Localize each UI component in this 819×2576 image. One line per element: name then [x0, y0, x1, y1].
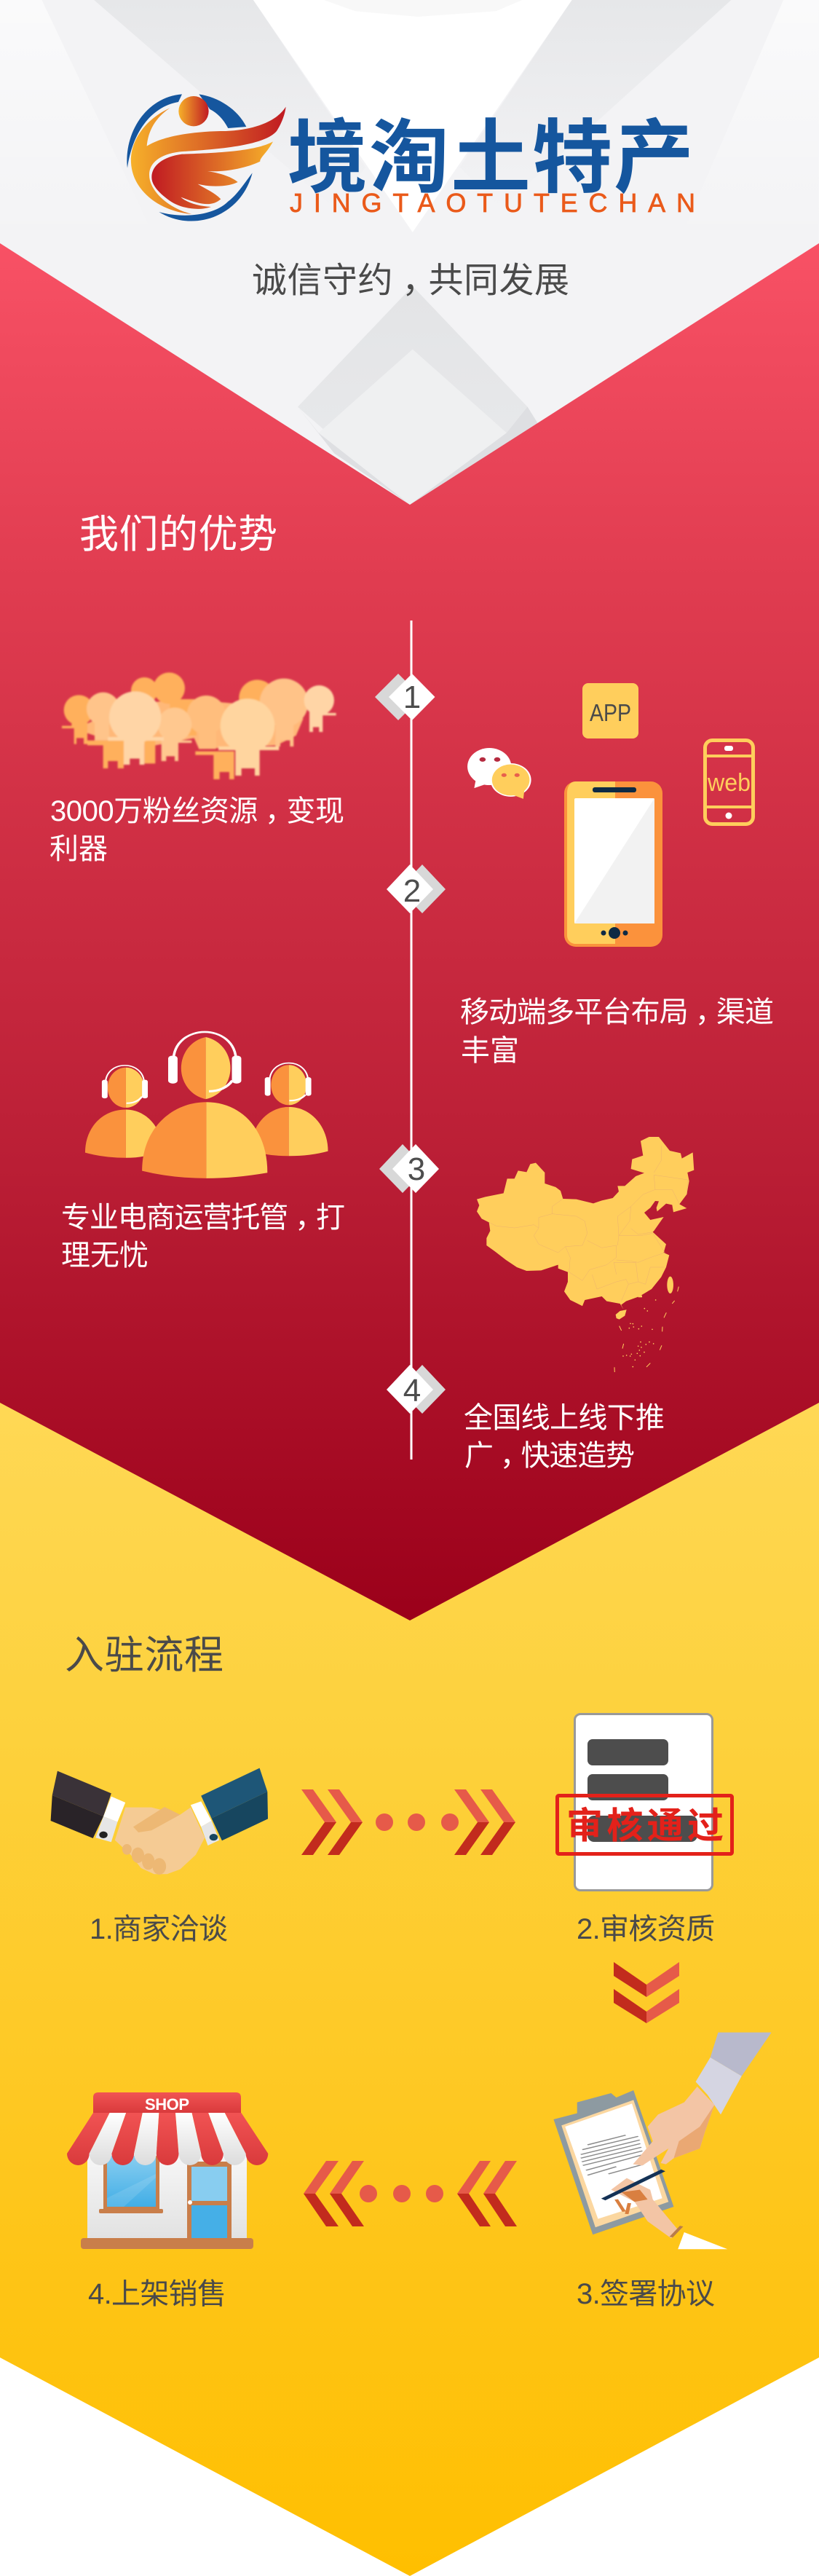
icon: map of China	[477, 1137, 694, 1372]
text: mobile platforms	[460, 996, 774, 1067]
text: nationwide promotion	[464, 1402, 665, 1472]
arrow: step 3 to 4	[304, 2161, 517, 2226]
icon: APP badge	[582, 683, 638, 738]
pen and lower hand	[604, 2170, 727, 2249]
stamp: 审核通过	[566, 1797, 724, 1849]
icon: signing agreement	[553, 2033, 772, 2249]
timeline marker 4: 4	[403, 1373, 421, 1409]
red panel background	[0, 243, 819, 1620]
timeline marker 3: 3	[408, 1151, 425, 1187]
icon: smartphone	[564, 781, 662, 947]
timeline marker 1	[375, 674, 435, 720]
sleeve and upper hand	[633, 2033, 772, 2165]
timeline marker 4	[387, 1365, 446, 1414]
logo name: 境淘土特产	[288, 114, 694, 203]
text: fans: 3000万粉丝资源，变现	[50, 795, 344, 827]
timeline marker 2: 2	[403, 873, 421, 909]
timeline marker 2	[387, 864, 446, 913]
icon: web phone	[705, 740, 753, 824]
heading: our advantages: 我们的优势	[79, 513, 277, 556]
logo	[127, 94, 695, 221]
text: operations hosting: 专业电商运营托管，打	[61, 1202, 345, 1234]
text: operations hosting: 理无忧	[61, 1240, 149, 1272]
label: step 4: 4.上架销售	[88, 2278, 226, 2310]
icon: approved document with stamp	[558, 1714, 732, 1891]
icon: chat bubbles	[467, 748, 531, 799]
shop window	[99, 2156, 163, 2213]
logo pinyin: JINGTAOTUTECHAN	[290, 188, 695, 218]
text: mobile platforms: 移动端多平台布局，渠道	[460, 996, 774, 1028]
awning	[67, 2113, 268, 2165]
tagline: 诚信守约 ，共同发展	[252, 261, 569, 300]
icon: shop	[67, 2092, 268, 2249]
label: step 3: 3.签署协议	[577, 2278, 715, 2310]
text: fans: 利器	[50, 833, 108, 865]
arrow: step 2 to 3	[614, 1962, 679, 2023]
timeline line	[411, 621, 412, 1460]
text: mobile platforms: 丰富	[461, 1035, 519, 1067]
icon: web phone: web	[707, 769, 751, 797]
text: nationwide promotion: 全国线上线下推	[464, 1402, 665, 1434]
shop sign: SHOP	[145, 2095, 189, 2114]
label: step 1: 1.商家洽谈	[90, 1913, 228, 1945]
text: operations hosting	[61, 1202, 345, 1272]
text: nationwide promotion: 广，快速造势	[464, 1440, 635, 1472]
clipboard	[553, 2090, 673, 2234]
label: step 2: 2.审核资质	[577, 1913, 715, 1945]
shop door	[187, 2162, 232, 2238]
icon: handshake	[51, 1768, 268, 1875]
timeline marker 3	[379, 1144, 439, 1193]
text: fans	[50, 795, 344, 865]
icon: crowd of fans	[62, 672, 336, 779]
logo icon: winged figure	[127, 94, 286, 221]
shop sign	[93, 2092, 241, 2114]
yellow panel background	[0, 1403, 819, 2576]
arrow: step 1 to 2	[301, 1789, 515, 1855]
timeline marker 1: 1	[403, 680, 421, 715]
header background	[0, 0, 819, 520]
icon: support team with headsets	[85, 1032, 328, 1178]
icon: APP badge: APP	[590, 699, 631, 726]
heading: onboarding process: 入驻流程	[65, 1634, 223, 1677]
